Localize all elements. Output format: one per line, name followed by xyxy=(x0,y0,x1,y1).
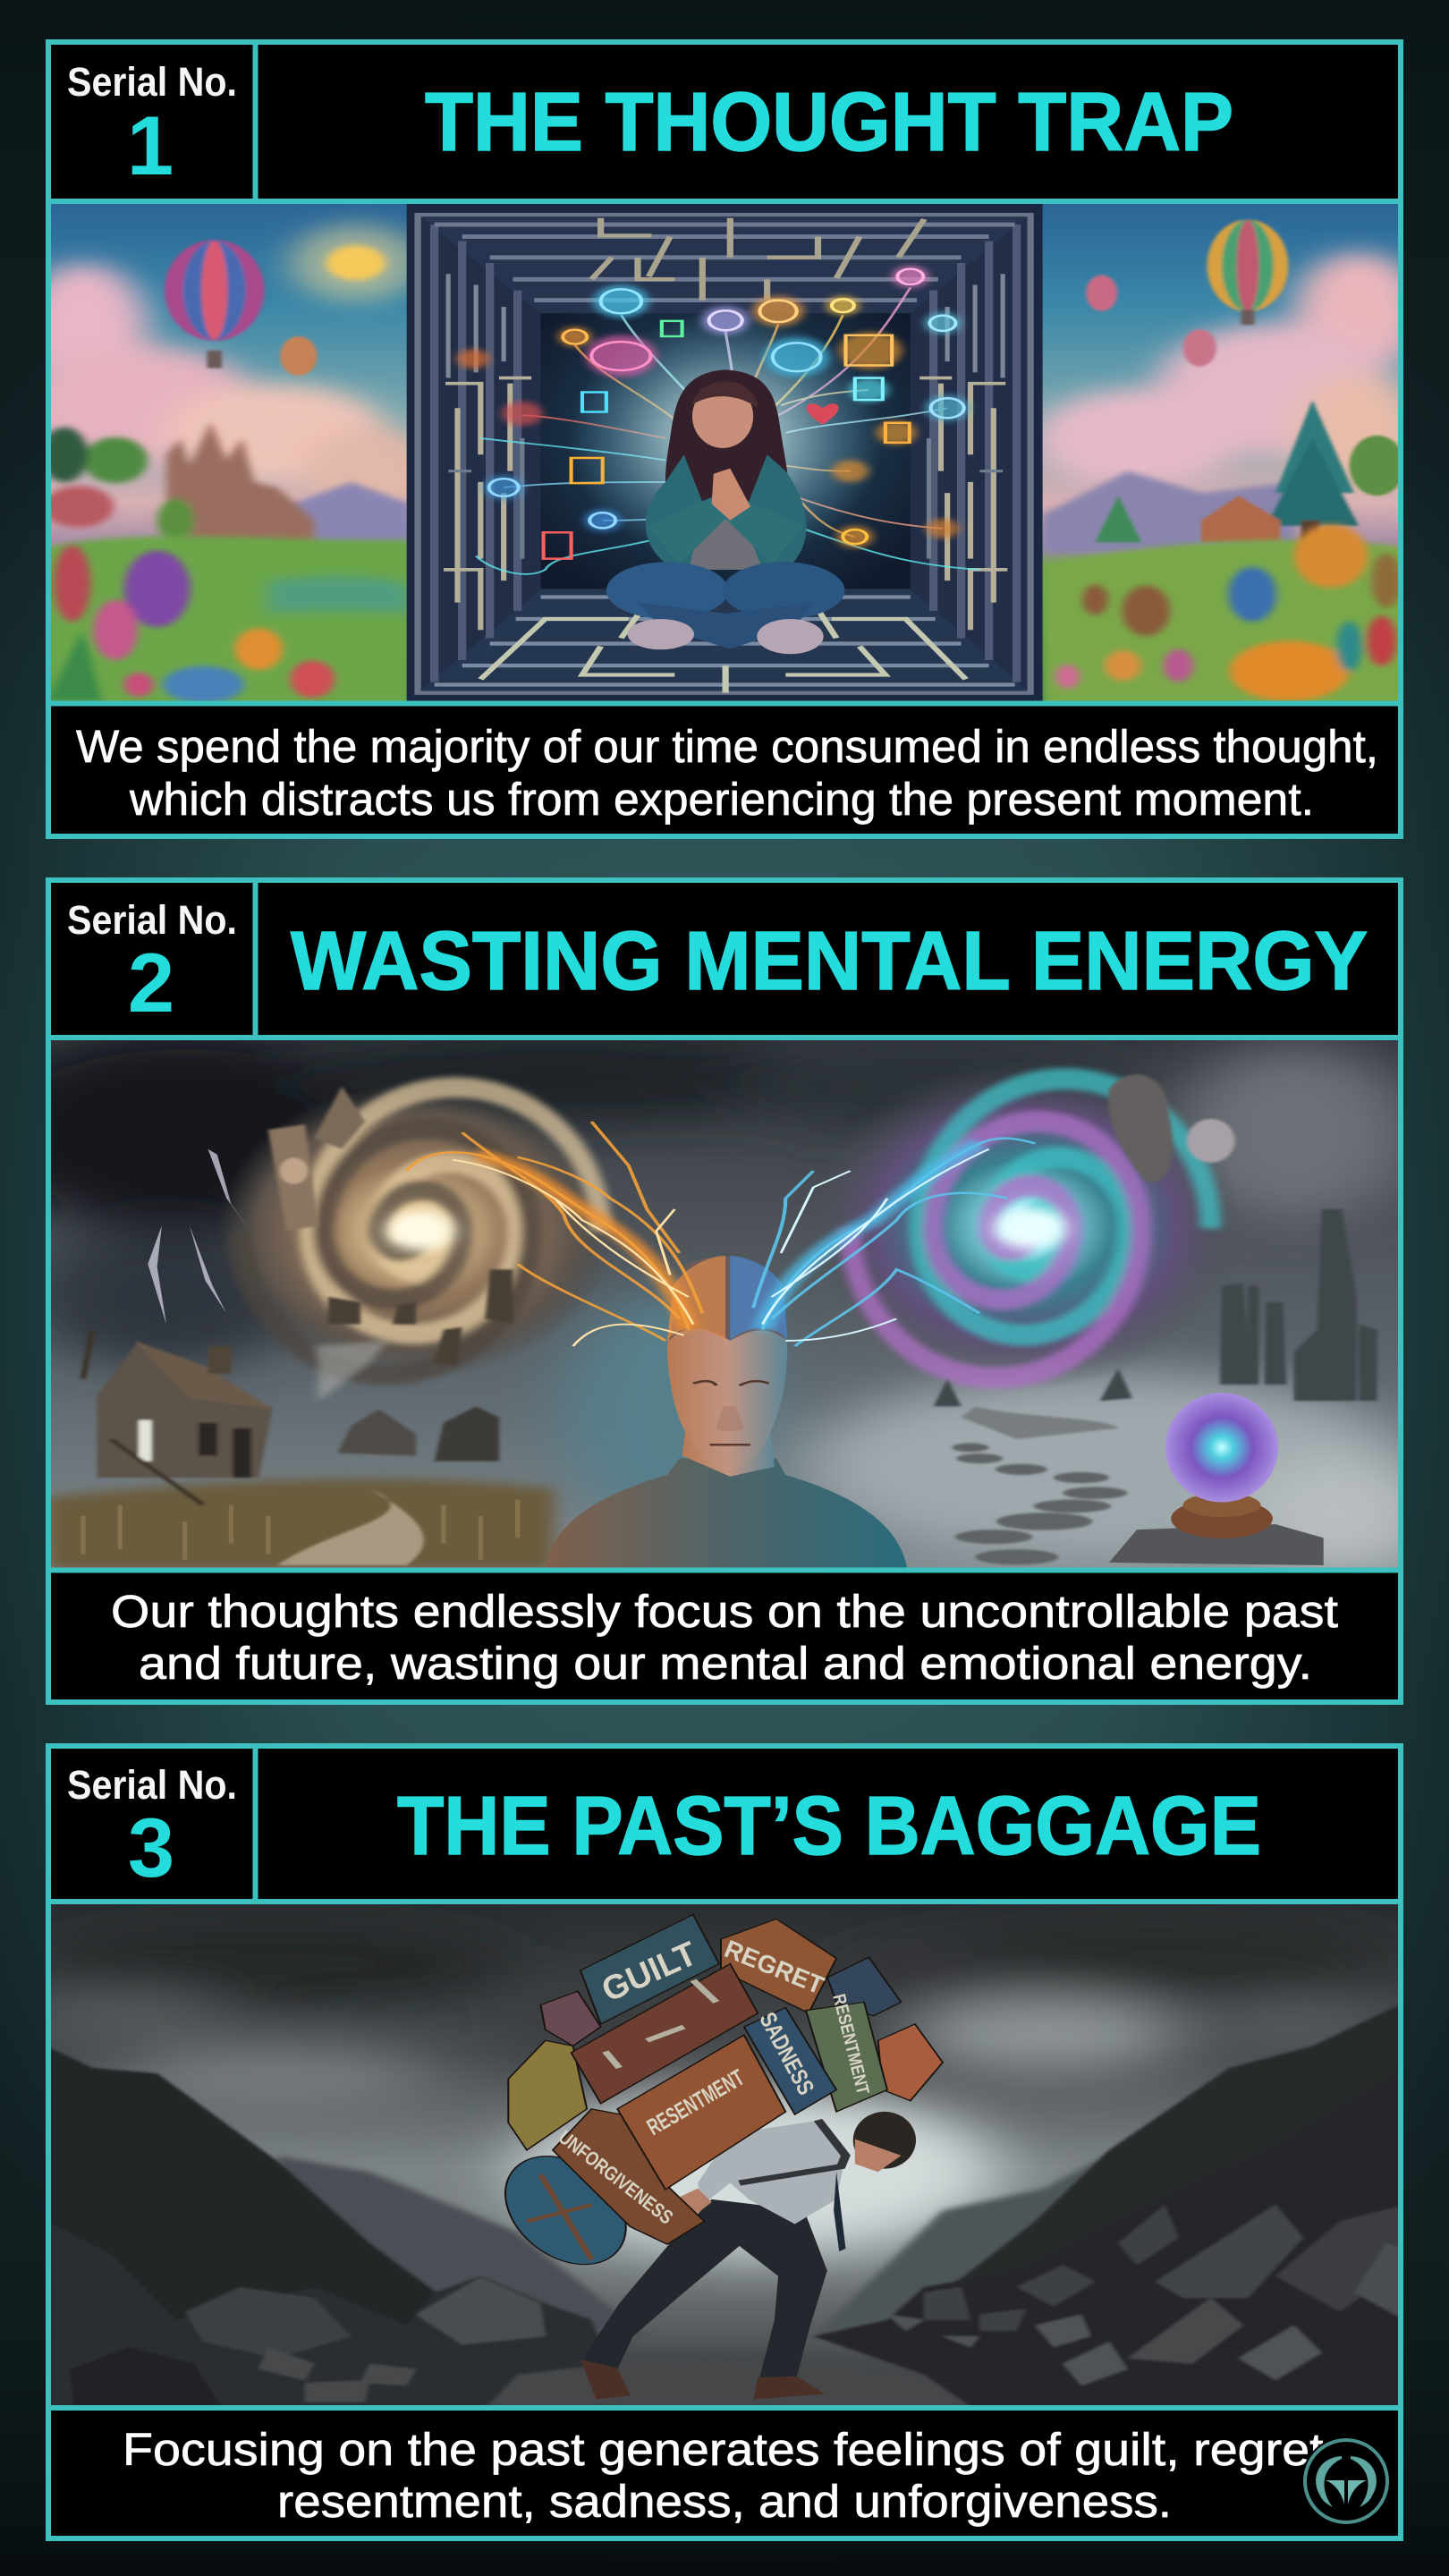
rock piles xyxy=(47,2068,1405,2413)
caption xyxy=(76,721,1378,825)
caption: and future, wasting our mental and emotional energy. xyxy=(139,1638,1312,1689)
glowing thought icons xyxy=(456,266,979,574)
luggage labels: RESENTMENT xyxy=(642,2063,749,2140)
caption: which distracts us from experiencing the present moment. xyxy=(129,774,1314,825)
luggage labels: GUILT xyxy=(597,1935,702,2010)
caption xyxy=(111,1586,1338,1689)
ruins, tower and cottage xyxy=(83,1209,1377,1505)
landscape left xyxy=(51,204,407,701)
logo badge xyxy=(1301,2436,1391,2526)
crystal ball on pedestal xyxy=(1109,1393,1324,1565)
luggage labels: RESENTMENT xyxy=(828,1992,872,2097)
serial number cell: 2 xyxy=(128,936,174,1030)
frame lines xyxy=(48,1746,1401,2538)
caption: We spend the majority of our time consumed in endless thought, xyxy=(76,721,1378,772)
serial number cell: Serial No. xyxy=(67,897,237,943)
caption: Focusing on the past generates feelings of guilt, regret, xyxy=(123,2424,1337,2475)
panel: the past's baggage xyxy=(28,1743,1405,2541)
landscape right xyxy=(1035,203,1423,707)
right vortex of the future xyxy=(809,1062,1243,1390)
caption xyxy=(123,2424,1337,2527)
serial number cell: Serial No. xyxy=(67,1762,237,1808)
left vortex of the past xyxy=(217,1083,614,1401)
serial number cell xyxy=(67,59,237,192)
stepping stone path xyxy=(952,1406,1128,1564)
luggage labels: REGRET xyxy=(721,1935,827,1999)
serial number cell: Serial No. xyxy=(67,59,237,105)
heading: WASTING MENTAL ENERGY xyxy=(291,914,1368,1007)
lightning streams xyxy=(407,1122,1035,1346)
heading: THE THOUGHT TRAP xyxy=(425,75,1233,168)
panel: the thought trap xyxy=(19,39,1423,839)
caption: Our thoughts endlessly focus on the uncontrollable past xyxy=(111,1586,1338,1637)
frame lines xyxy=(48,42,1401,836)
man bent under weight xyxy=(580,2112,916,2399)
luggage pile xyxy=(484,1914,943,2274)
luggage labels: UNFORGIVENESS xyxy=(555,2126,677,2229)
sky and mountains xyxy=(28,1903,1405,2413)
serial number cell: 1 xyxy=(127,98,174,192)
frame lines xyxy=(48,880,1401,1702)
maze room xyxy=(407,203,1043,704)
illustration: man carrying a heap of labelled luggage xyxy=(28,1903,1405,2413)
caption: resentment, sadness, and unforgiveness. xyxy=(277,2476,1172,2527)
serial number cell xyxy=(67,1762,237,1894)
illustration: woman meditating in a maze between colourful landscapes xyxy=(19,203,1423,707)
man with lightning thoughts xyxy=(546,1256,908,1571)
illustration: head split between two swirling vortices xyxy=(0,1034,1442,1576)
stormy sky and ground xyxy=(0,1034,1442,1576)
serial number cell xyxy=(67,897,237,1030)
serial number cell: 3 xyxy=(128,1801,174,1894)
panel: wasting mental energy xyxy=(0,877,1442,1705)
luggage labels xyxy=(555,1935,872,2229)
woman seated with hands together xyxy=(606,369,844,654)
luggage labels: SADNESS xyxy=(754,2008,820,2099)
heading: THE PAST’S BAGGAGE xyxy=(397,1779,1261,1872)
